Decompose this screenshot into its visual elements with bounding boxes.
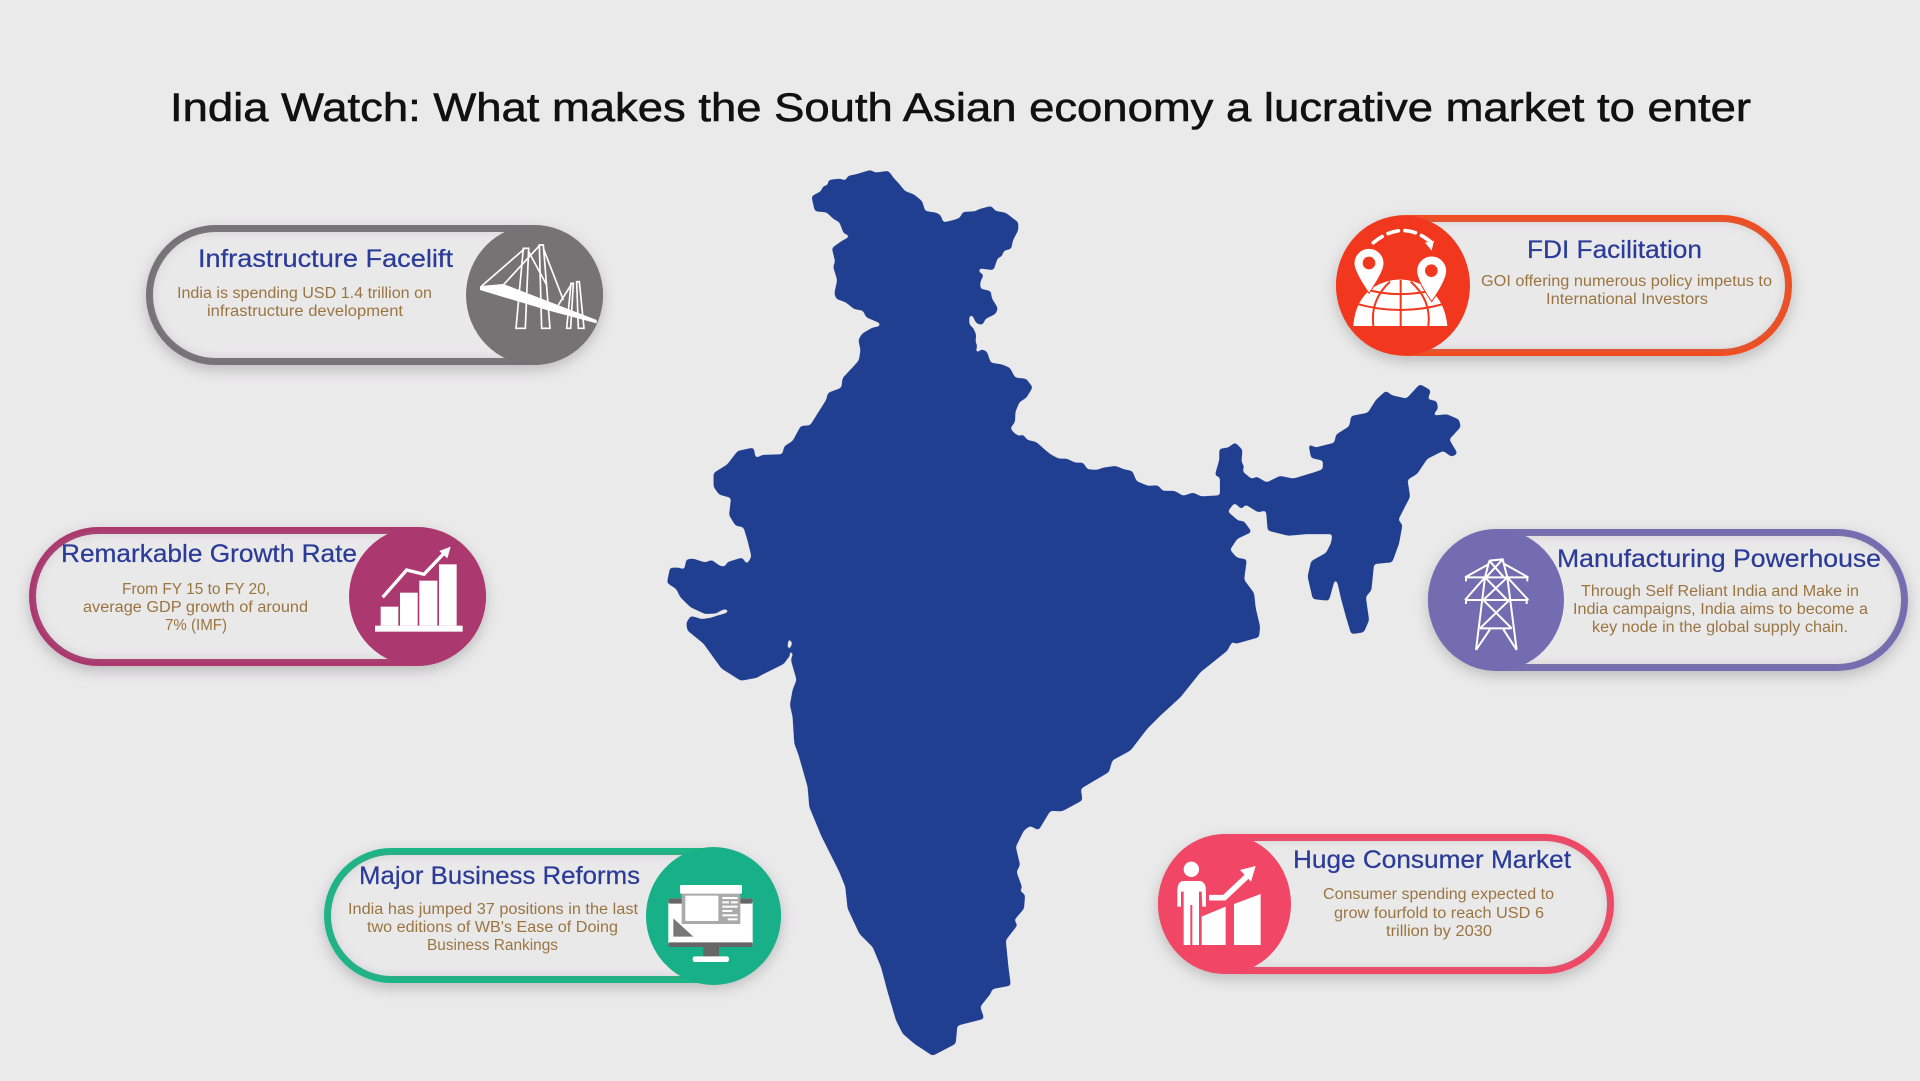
description: India campaigns, India aims to become a: [1573, 601, 1868, 618]
icon: desktop monitor: [668, 885, 753, 962]
panel: FDI Facilitation: [1336, 216, 1788, 356]
description: [83, 581, 308, 634]
description: From FY 15 to FY 20,: [122, 581, 270, 598]
description: average GDP growth of around: [83, 599, 308, 616]
map of India: [668, 171, 1460, 1055]
description: Business Rankings: [427, 937, 558, 954]
panel: Major Business Reforms: [328, 847, 781, 985]
description: [1323, 886, 1554, 940]
panel: Huge Consumer Market: [1158, 834, 1610, 974]
description: India has jumped 37 positions in the last: [348, 901, 639, 918]
icon: person with growth arrow: [1177, 862, 1261, 945]
description: 7% (IMF): [165, 617, 227, 634]
icon: globe with location pins: [1353, 230, 1447, 326]
description: Through Self Reliant India and Make in: [1581, 583, 1859, 600]
description: [1481, 273, 1772, 308]
description: infrastructure development: [207, 303, 404, 320]
description: International Investors: [1546, 291, 1708, 308]
icon: rising bar chart: [375, 547, 463, 632]
title: India Watch: What makes the South Asian economy a lucrative market to enter: [170, 86, 1751, 130]
panel: Manufacturing Powerhouse: [1428, 529, 1904, 671]
heading: Infrastructure Facelift: [198, 245, 453, 273]
description: two editions of WB's Ease of Doing: [367, 919, 618, 936]
heading: FDI Facilitation: [1527, 236, 1702, 264]
heading: Remarkable Growth Rate: [61, 540, 357, 568]
panel: Remarkable Growth Rate: [32, 527, 486, 666]
description: [177, 285, 432, 320]
heading: Manufacturing Powerhouse: [1557, 545, 1881, 573]
panel: Infrastructure Facelift: [150, 225, 603, 365]
heading: Major Business Reforms: [359, 862, 640, 890]
icon: transmission tower: [1465, 559, 1528, 650]
description: GOI offering numerous policy impetus to: [1481, 273, 1772, 290]
description: Consumer spending expected to: [1323, 886, 1554, 903]
description: [1573, 583, 1868, 636]
description: grow fourfold to reach USD 6: [1334, 905, 1544, 922]
description: [348, 901, 639, 954]
heading: Huge Consumer Market: [1293, 846, 1571, 874]
description: trillion by 2030: [1386, 923, 1492, 940]
icon: bridge: [480, 245, 597, 328]
description: India is spending USD 1.4 trillion on: [177, 285, 432, 302]
description: key node in the global supply chain.: [1592, 619, 1848, 636]
